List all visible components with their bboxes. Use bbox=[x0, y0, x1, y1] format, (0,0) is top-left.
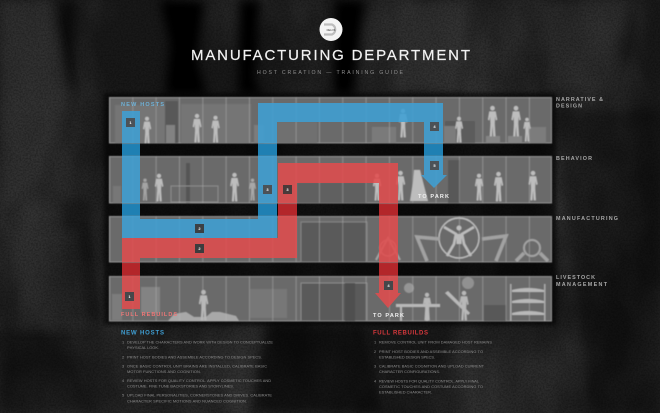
route labels bbox=[121, 102, 449, 319]
text block: full rebuilds steps: ESTABLISHED DESIGN SPECS. bbox=[379, 354, 435, 360]
text block: full rebuilds steps: REMOVE CONTROL UNIT FROM DAMAGED HOST REMAINS bbox=[379, 340, 492, 344]
text block: new hosts steps: MOTOR FUNCTIONS AND COGNITION. bbox=[127, 369, 201, 374]
route step badges: 4 bbox=[433, 124, 436, 129]
text block: full rebuilds steps: 2 bbox=[374, 349, 376, 354]
text block: new hosts steps bbox=[121, 330, 273, 404]
figures: design staff bbox=[143, 106, 531, 143]
route step badges bbox=[125, 118, 439, 301]
row labels: NARRATIVE & bbox=[556, 97, 603, 103]
text block: new hosts steps: PRINT HOST BODIES AND ASSEMBLE ACCORDING TO DESIGN SPECS. bbox=[127, 354, 262, 360]
route labels: NEW HOSTS bbox=[121, 102, 164, 108]
text block: full rebuilds steps: COSMETIC TOUCHES AND COSTUME ACCORDING TO bbox=[379, 384, 483, 389]
text block: new hosts steps: REVIEW HOSTS FOR QUALITY CONTROL. APPLY COSMETIC TOUCHES AND bbox=[127, 378, 271, 383]
text block: full rebuilds steps: CHARACTER CONFIGURATIONS. bbox=[379, 369, 440, 374]
text block: new hosts steps: CHARACTER SPECIFIC MOTIONS AND NUANCED COGNITION. bbox=[127, 398, 247, 404]
text block: new hosts steps: 4 bbox=[122, 378, 125, 383]
text block: new hosts steps: 3 bbox=[122, 364, 124, 368]
robotic arms and gear bbox=[376, 236, 548, 261]
route step badges: 1 bbox=[128, 294, 131, 299]
logo: DELOS bbox=[327, 28, 336, 32]
text block: new hosts steps: ONCE BASIC CONTROL UNIT BRAINS ARE INSTALLED, CALIBRATE BASIC bbox=[127, 364, 267, 368]
text block: new hosts steps: NEW HOSTS bbox=[121, 330, 164, 336]
route step badges: 4 bbox=[387, 283, 390, 288]
text block: new hosts steps: 1 bbox=[122, 340, 124, 344]
text block: full rebuilds steps: FULL REBUILDS bbox=[373, 330, 428, 336]
panel: manufacturing bbox=[109, 216, 552, 262]
text block: new hosts steps: 2 bbox=[122, 354, 124, 360]
text block: full rebuilds steps: PRINT HOST BODIES AND ASSEMBLE ACCORDING TO bbox=[379, 349, 483, 354]
title: MANUFACTURING DEPARTMENT bbox=[191, 47, 470, 64]
route step badges: 1 bbox=[129, 120, 132, 125]
text block: new hosts steps: PHYSICAL LOOK. bbox=[127, 345, 159, 350]
text block: new hosts steps: COSTUME. FINE TUNE BACKSTORIES AND STORYLINES. bbox=[127, 384, 234, 388]
panel: behavior bbox=[109, 156, 552, 203]
text block: new hosts steps: DEVELOP THE CHARACTERS AND WORK WITH DESIGN TO CONCEPTUALIZE bbox=[127, 340, 273, 344]
route labels: TO PARK bbox=[418, 194, 449, 200]
route step badges: 3 bbox=[286, 187, 289, 192]
text block: new hosts steps: UPLOAD FINAL PERSONALITIES, CORNERSTONES AND DRIVES. CALIBRATE bbox=[127, 392, 272, 398]
route step badges: 2 bbox=[198, 246, 201, 251]
text block: full rebuilds steps: 3 bbox=[374, 364, 376, 368]
row labels bbox=[556, 97, 618, 288]
row labels: MANAGEMENT bbox=[556, 282, 608, 288]
row labels: DESIGN bbox=[556, 104, 582, 110]
logo bbox=[320, 18, 342, 41]
panel: narrative and design bbox=[109, 97, 552, 143]
row labels: LIVESTOCK bbox=[556, 275, 595, 281]
route step badges: 2 bbox=[198, 226, 201, 231]
route labels: TO PARK bbox=[373, 313, 404, 319]
vitruvian host in ring bbox=[439, 218, 479, 258]
path: under-panel dark route segments bbox=[122, 103, 447, 309]
text block: full rebuilds steps: REVIEW HOSTS FOR QUALITY CONTROL. APPLY FINAL bbox=[379, 378, 480, 384]
row labels: BEHAVIOR bbox=[556, 156, 592, 162]
route labels: FULL REBUILDS bbox=[121, 312, 177, 318]
route step badges: 3 bbox=[266, 187, 269, 192]
row labels: MANUFACTURING bbox=[556, 216, 618, 222]
text block: full rebuilds steps: 4 bbox=[374, 378, 377, 384]
panel: livestock management bbox=[109, 276, 552, 321]
path: full rebuilds route bbox=[122, 163, 401, 309]
subtitle: HOST CREATION — TRAINING GUIDE bbox=[257, 70, 404, 76]
text block: new hosts steps: 5 bbox=[122, 392, 124, 398]
text block: full rebuilds steps: 1 bbox=[374, 340, 376, 344]
route step badges: 5 bbox=[433, 163, 436, 168]
text block: full rebuilds steps: CALIBRATE BASIC COGNITION AND UPLOAD CURRENT bbox=[379, 364, 485, 368]
text block: full rebuilds steps bbox=[373, 330, 492, 394]
text block: full rebuilds steps: ESTABLISHED CHARACTER. bbox=[379, 390, 432, 394]
path: new hosts route bbox=[122, 103, 447, 238]
figures: livestock techs and bodies bbox=[168, 277, 546, 321]
figures: behavior staff bbox=[142, 170, 538, 201]
